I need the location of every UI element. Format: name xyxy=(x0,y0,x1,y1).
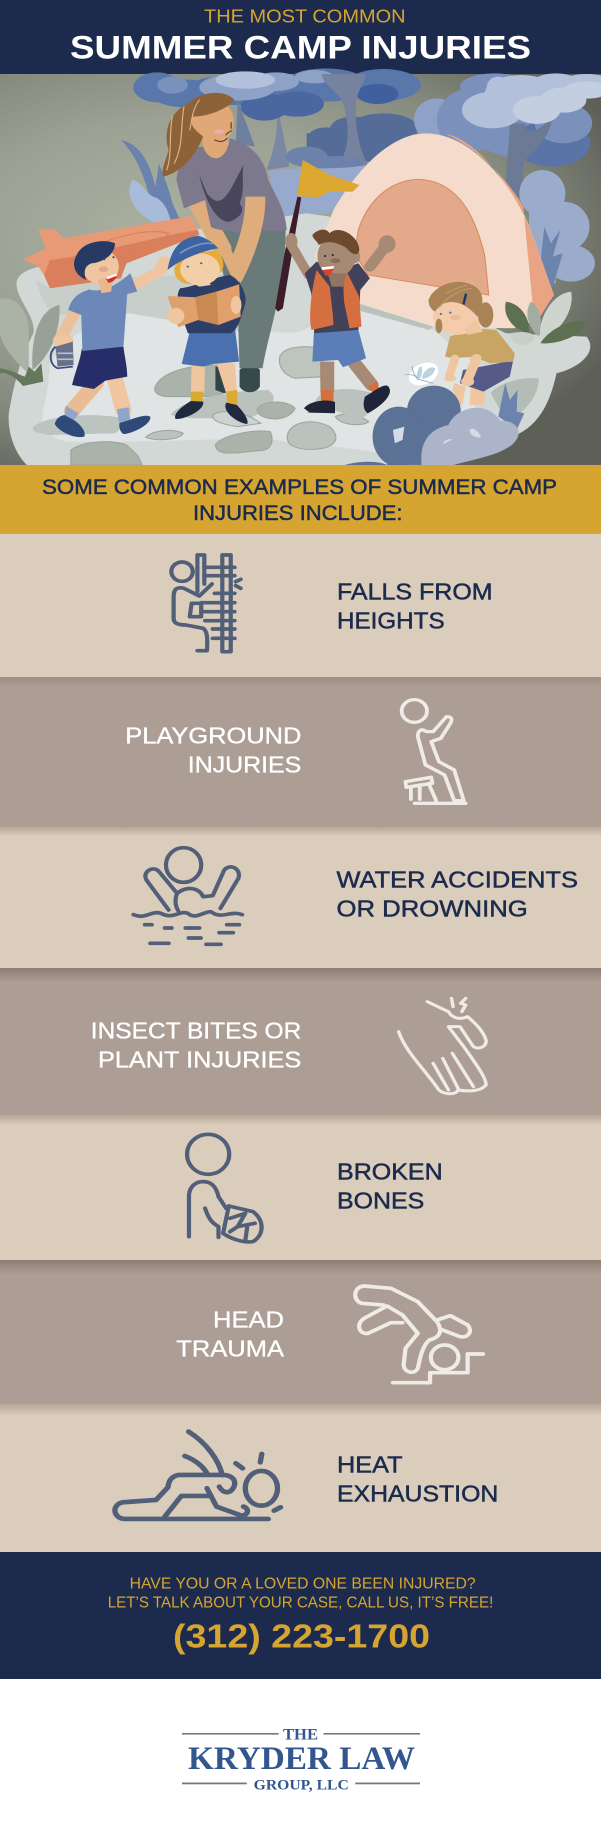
label: insect bites or plant injuries: PLANT INJURIES xyxy=(98,1046,301,1072)
label: falls from heights: HEIGHTS xyxy=(337,608,445,634)
tent xyxy=(314,133,554,330)
front bushes xyxy=(345,383,526,467)
label: head trauma xyxy=(176,1307,285,1362)
header banner xyxy=(0,0,601,74)
stones xyxy=(33,347,539,465)
icon: person collapsed from heat xyxy=(115,1432,281,1519)
row: water accidents xyxy=(0,827,601,968)
girl crouching xyxy=(429,282,515,407)
label: falls from heights: FALLS FROM xyxy=(337,578,493,604)
phone number: (312) 223-1700 xyxy=(173,1618,430,1655)
logo: The Kryder Law Group: KRYDER LAW xyxy=(188,1741,415,1777)
row: insect bites xyxy=(0,968,601,1115)
label: playground injuries: PLAYGROUND xyxy=(125,722,301,748)
label: water accidents or drowning xyxy=(336,867,578,922)
row: heat exhaustion xyxy=(0,1404,601,1552)
gold band heading xyxy=(0,465,601,534)
logo: The Kryder Law Group: THE xyxy=(283,1726,318,1743)
call to action text: LET’S TALK ABOUT YOUR CASE, CALL US, IT’S FREE! xyxy=(108,1594,493,1611)
logo: The Kryder Law Group: GROUP, LLC xyxy=(254,1777,349,1793)
icon: person falling on stairs xyxy=(355,1286,483,1383)
illustration: summer camp scene xyxy=(0,68,601,467)
label: head trauma: HEAD xyxy=(213,1307,284,1333)
header kicker: THE MOST COMMON xyxy=(204,6,406,27)
label: falls from heights xyxy=(337,578,493,634)
girl with hat and map xyxy=(168,236,248,424)
label: playground injuries xyxy=(125,722,301,778)
label: insect bites or plant injuries: INSECT BITES OR xyxy=(91,1017,301,1043)
ground xyxy=(9,213,590,465)
row: head trauma xyxy=(0,1260,601,1404)
title: SUMMER CAMP INJURIES xyxy=(70,29,531,65)
icon: climber on ladder xyxy=(171,555,241,652)
icon: child falling off stool xyxy=(402,700,466,803)
label: insect bites or plant injuries xyxy=(91,1017,301,1072)
label: water accidents or drowning: WATER ACCIDENTS xyxy=(336,867,578,893)
plant right xyxy=(505,292,585,345)
row: broken bones xyxy=(0,1115,601,1260)
label: water accidents or drowning: OR DROWNING xyxy=(336,896,528,922)
flag and pole xyxy=(275,160,360,312)
plant left xyxy=(0,298,60,386)
label: playground injuries: INJURIES xyxy=(188,752,301,778)
gold band heading: SOME COMMON EXAMPLES OF SUMMER CAMP xyxy=(42,476,557,499)
label: broken bones xyxy=(337,1158,443,1213)
boy with vest xyxy=(285,230,396,413)
label: head trauma: TRAUMA xyxy=(176,1336,285,1362)
label: broken bones: BONES xyxy=(337,1187,424,1213)
left boy xyxy=(51,241,173,437)
row: playground injuries xyxy=(0,677,601,827)
icon: arm in cast xyxy=(187,1134,262,1242)
call to action footer xyxy=(0,1552,601,1679)
butterfly xyxy=(404,358,443,390)
icon: hand with insect bite xyxy=(399,998,486,1094)
woman camp leader xyxy=(162,93,287,393)
label: heat exhaustion xyxy=(337,1452,498,1507)
logo: The Kryder Law Group xyxy=(182,1726,420,1793)
label: heat exhaustion: EXHAUSTION xyxy=(337,1481,498,1507)
gold band heading: INJURIES INCLUDE: xyxy=(193,502,402,525)
row: falls from heights xyxy=(0,534,601,677)
fallen log xyxy=(23,216,199,288)
call to action text xyxy=(108,1575,493,1611)
label: heat exhaustion: HEAT xyxy=(337,1452,402,1478)
trees and foliage background xyxy=(121,68,601,297)
call to action text: HAVE YOU OR A LOVED ONE BEEN INJURED? xyxy=(130,1575,476,1592)
icon: person drowning xyxy=(133,848,242,944)
label: broken bones: BROKEN xyxy=(337,1158,443,1184)
